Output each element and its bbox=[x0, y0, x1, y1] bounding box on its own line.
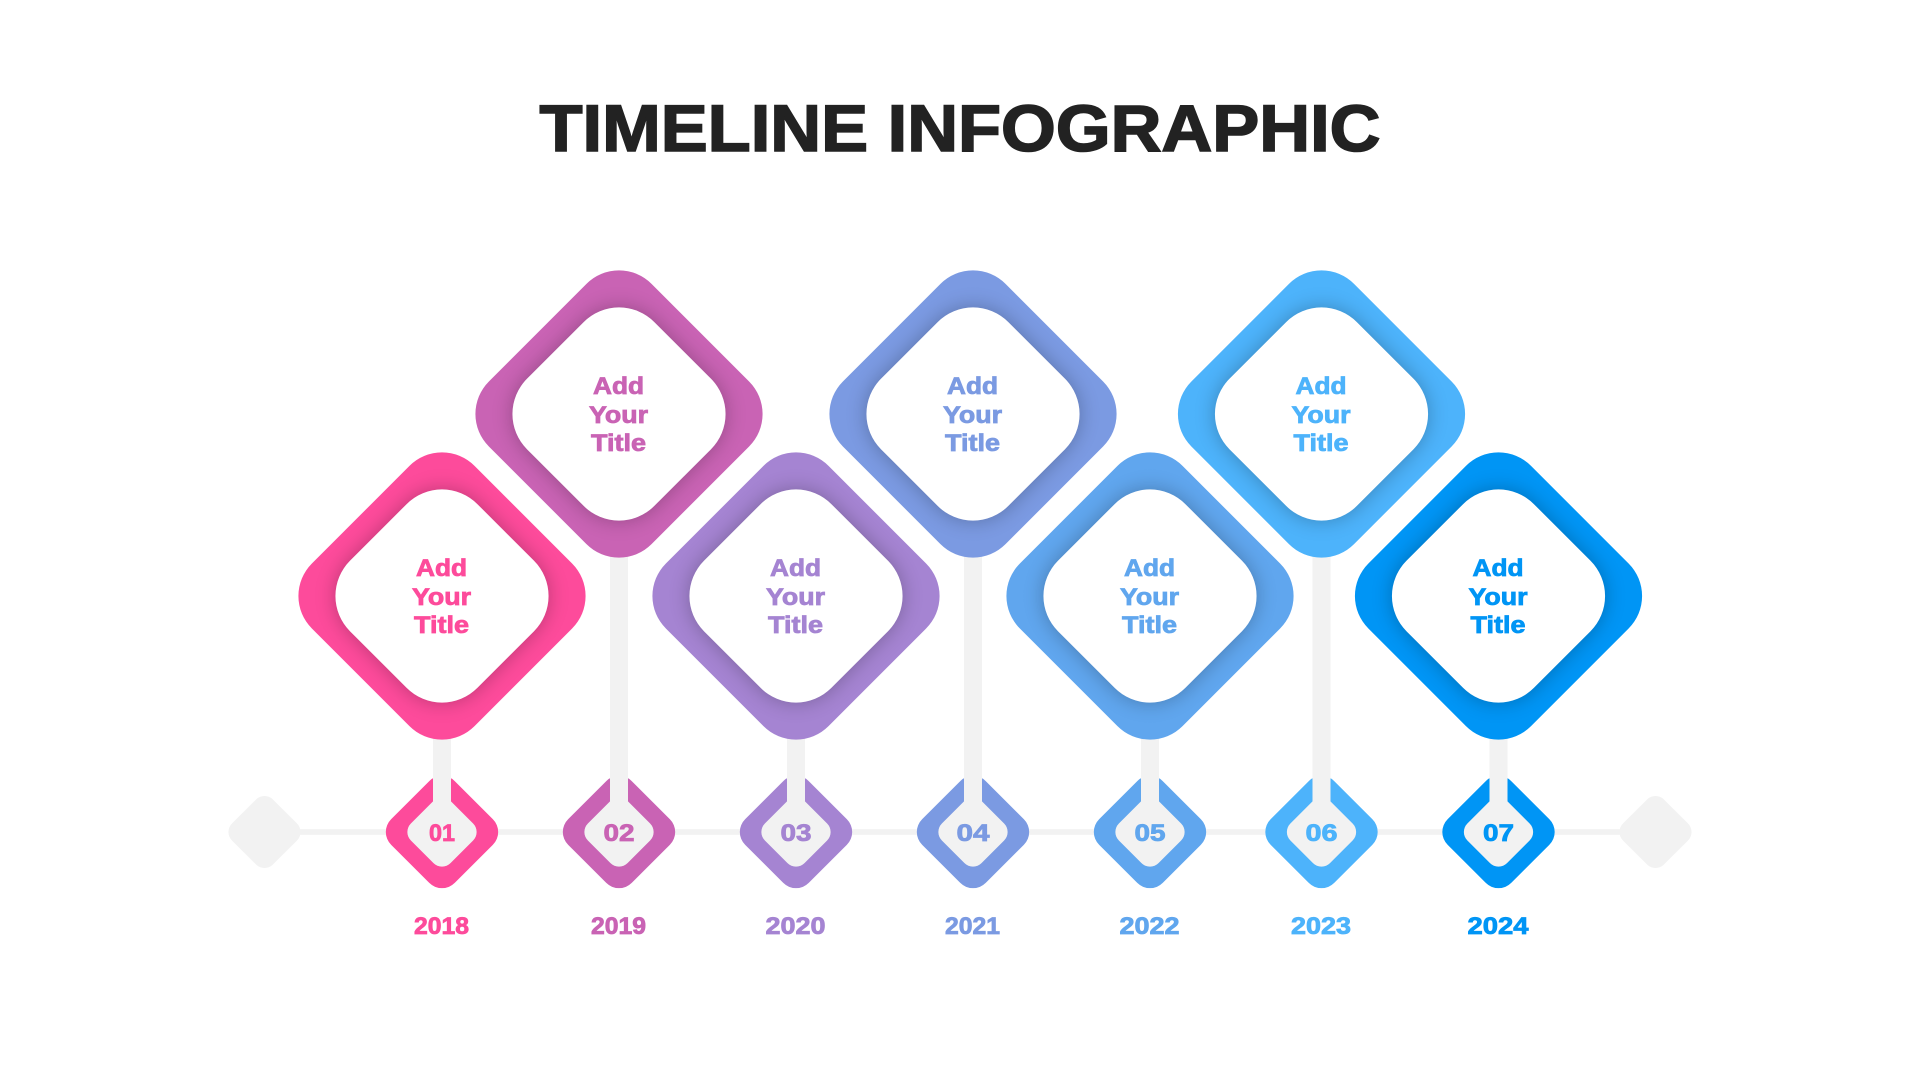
card title 07: Your bbox=[1468, 584, 1528, 611]
card title 05 bbox=[1120, 555, 1179, 639]
card title 07: Title bbox=[1470, 612, 1526, 639]
diamond card 01 bbox=[298, 452, 586, 740]
card title 01: Add bbox=[416, 555, 467, 582]
card title 02: Your bbox=[589, 402, 648, 429]
card title 07 bbox=[1468, 555, 1528, 639]
step 02 bbox=[456, 251, 782, 940]
node 02 bbox=[555, 768, 683, 896]
node 05 bbox=[1086, 768, 1214, 896]
diamond card 03 bbox=[652, 452, 940, 740]
card title 03: Your bbox=[766, 584, 825, 611]
step 01 bbox=[298, 452, 586, 934]
step 04 bbox=[810, 251, 1136, 940]
card title 01: Your bbox=[412, 584, 471, 611]
diamond card 06 bbox=[1178, 270, 1466, 558]
number 03: 03 bbox=[780, 820, 812, 847]
step 07 bbox=[1354, 452, 1642, 934]
timeline axis line bbox=[290, 829, 1660, 835]
stem 07 bbox=[1490, 720, 1508, 832]
number 04: 04 bbox=[956, 820, 990, 847]
year 2019: 2019 bbox=[591, 913, 646, 940]
card title 02: Add bbox=[593, 373, 644, 400]
number 07: 07 bbox=[1483, 820, 1514, 847]
diamond card 07 bbox=[1354, 452, 1642, 740]
step 03 bbox=[652, 452, 940, 934]
node 04 bbox=[909, 768, 1037, 896]
year 2018: 2018 bbox=[414, 913, 469, 940]
card title 06: Add bbox=[1296, 373, 1346, 400]
card title 03 bbox=[766, 555, 825, 639]
card title 06 bbox=[1292, 373, 1350, 457]
year 2023: 2023 bbox=[1291, 913, 1351, 940]
card title 04: Your bbox=[943, 402, 1002, 429]
node 01 bbox=[378, 768, 506, 896]
stem 05 bbox=[1141, 720, 1159, 832]
number 02: 02 bbox=[603, 820, 635, 847]
diamond card 04 bbox=[829, 270, 1117, 558]
node 03 bbox=[732, 768, 860, 896]
card title 06: Your bbox=[1292, 402, 1350, 429]
card title 04 bbox=[943, 373, 1002, 457]
stem 04 bbox=[964, 540, 982, 832]
end marker bbox=[1614, 791, 1697, 873]
node 07 bbox=[1435, 768, 1562, 896]
card title 07: Add bbox=[1472, 555, 1524, 582]
card title 04: Add bbox=[947, 373, 998, 400]
year 2020: 2020 bbox=[766, 913, 826, 940]
start marker bbox=[223, 791, 306, 873]
card title 02: Title bbox=[591, 430, 646, 457]
stem 02 bbox=[610, 540, 628, 832]
card title 01: Title bbox=[414, 612, 469, 639]
card title 02 bbox=[589, 373, 648, 457]
card title 03: Title bbox=[768, 612, 823, 639]
year 2021: 2021 bbox=[945, 913, 1000, 940]
card title 05: Your bbox=[1120, 584, 1179, 611]
year 2022: 2022 bbox=[1120, 913, 1180, 940]
stem 06 bbox=[1312, 540, 1330, 832]
diamond card 02 bbox=[475, 270, 763, 558]
diamond card 05 bbox=[1006, 452, 1294, 740]
stem 01 bbox=[433, 720, 451, 832]
card title 06: Title bbox=[1294, 430, 1348, 457]
card title 01 bbox=[412, 555, 471, 639]
card title 05: Title bbox=[1122, 612, 1177, 639]
card title 05: Add bbox=[1124, 555, 1175, 582]
card title 04: Title bbox=[945, 430, 1000, 457]
title: TIMELINE INFOGRAPHIC bbox=[540, 91, 1380, 165]
number 01: 01 bbox=[429, 820, 455, 847]
stem 03 bbox=[787, 720, 805, 832]
node 06 bbox=[1258, 768, 1385, 896]
step 06 bbox=[1159, 251, 1484, 940]
card title 03: Add bbox=[770, 555, 821, 582]
step 05 bbox=[1006, 452, 1294, 934]
number 05: 05 bbox=[1134, 820, 1166, 847]
number 06: 06 bbox=[1306, 820, 1338, 847]
year 2024: 2024 bbox=[1468, 913, 1529, 940]
